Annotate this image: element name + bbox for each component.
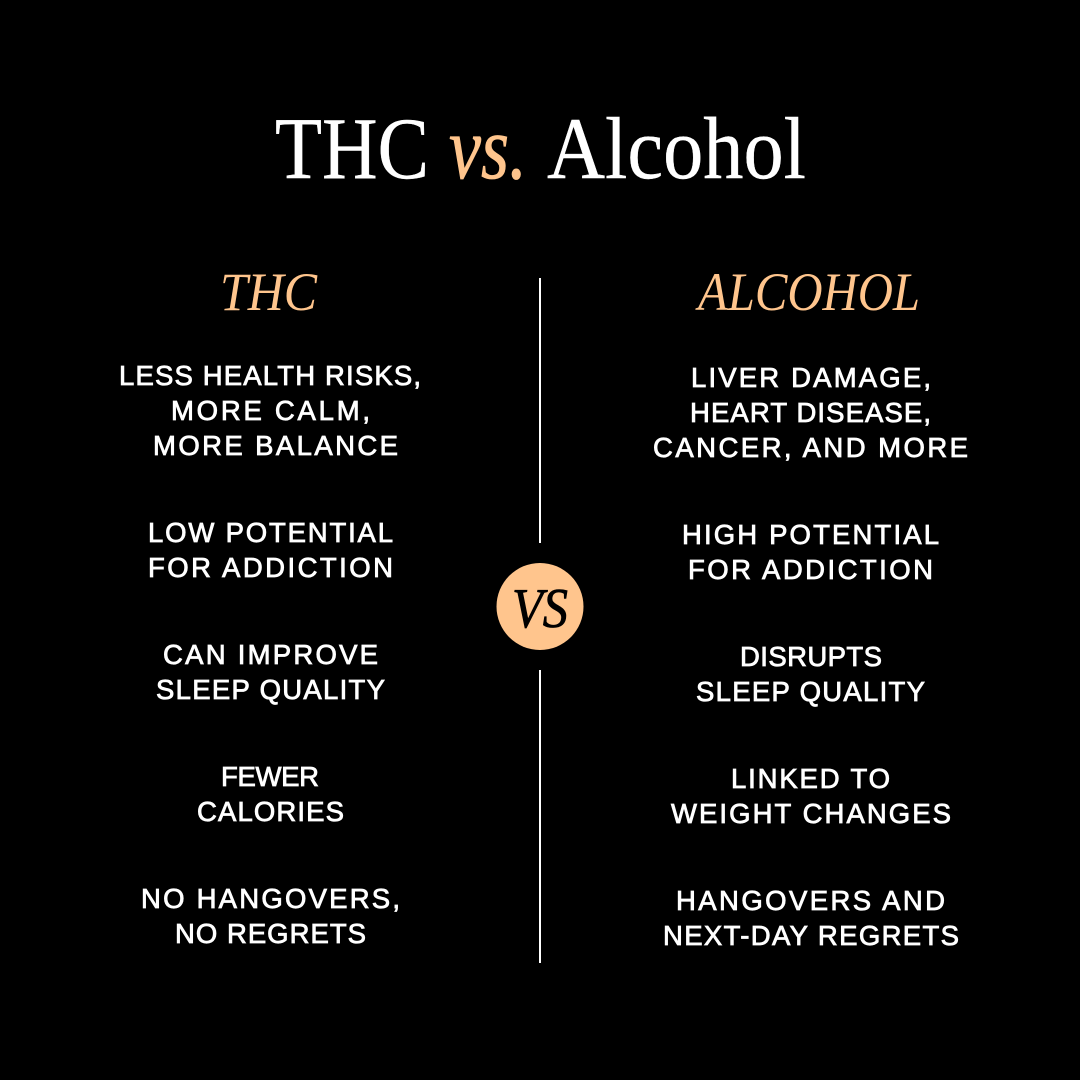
- text: hangovers: HANGOVERS AND: [676, 885, 945, 916]
- text: health risks: CANCER, AND MORE: [653, 432, 968, 463]
- text: addiction: HIGH POTENTIAL: [682, 519, 939, 550]
- text: sleep: SLEEP QUALITY: [156, 674, 385, 705]
- text: health risks: [653, 362, 968, 463]
- text: health risks: MORE CALM,: [171, 395, 370, 426]
- text: hangovers: NO HANGOVERS,: [141, 883, 400, 914]
- text: health risks: HEART DISEASE,: [690, 397, 931, 428]
- text: health risks: LIVER DAMAGE,: [691, 362, 931, 393]
- text: addiction: FOR ADDICTION: [688, 554, 933, 585]
- text: hangovers: NEXT-DAY REGRETS: [663, 920, 959, 951]
- text: weight: [671, 763, 951, 829]
- heading: THC: THC: [220, 262, 318, 322]
- text: addiction: FOR ADDICTION: [148, 552, 393, 583]
- text: hangovers: [141, 883, 400, 949]
- icon: VS badge: VS: [512, 578, 568, 640]
- text: addiction: [148, 517, 393, 583]
- title: [275, 99, 806, 198]
- text: hangovers: NO REGRETS: [175, 918, 366, 949]
- text: calories: FEWER: [221, 761, 319, 792]
- text: health risks: LESS HEALTH RISKS,: [119, 360, 421, 391]
- title: Alcohol: [547, 101, 806, 198]
- text: sleep: [696, 641, 925, 707]
- text: calories: CALORIES: [197, 796, 344, 827]
- text: addiction: LOW POTENTIAL: [148, 517, 393, 548]
- title: THC: [275, 101, 429, 198]
- title: vs.: [449, 99, 527, 198]
- text: hangovers: [663, 885, 959, 951]
- panel: Alcohol column: [653, 262, 968, 951]
- icon: VS badge: [496, 563, 584, 650]
- text: health risks: [119, 360, 421, 461]
- text: sleep: [156, 639, 385, 705]
- text: weight: WEIGHT CHANGES: [671, 798, 951, 829]
- text: sleep: SLEEP QUALITY: [696, 676, 925, 707]
- text: sleep: DISRUPTS: [740, 641, 882, 672]
- text: weight: LINKED TO: [731, 763, 890, 794]
- text: calories: [197, 761, 344, 827]
- panel: THC column: [119, 262, 421, 949]
- panel: divider with VS badge: [496, 278, 584, 963]
- text: health risks: MORE BALANCE: [153, 430, 398, 461]
- text: addiction: [682, 519, 939, 585]
- text: sleep: CAN IMPROVE: [163, 639, 378, 670]
- heading: ALCOHOL: ALCOHOL: [695, 262, 920, 322]
